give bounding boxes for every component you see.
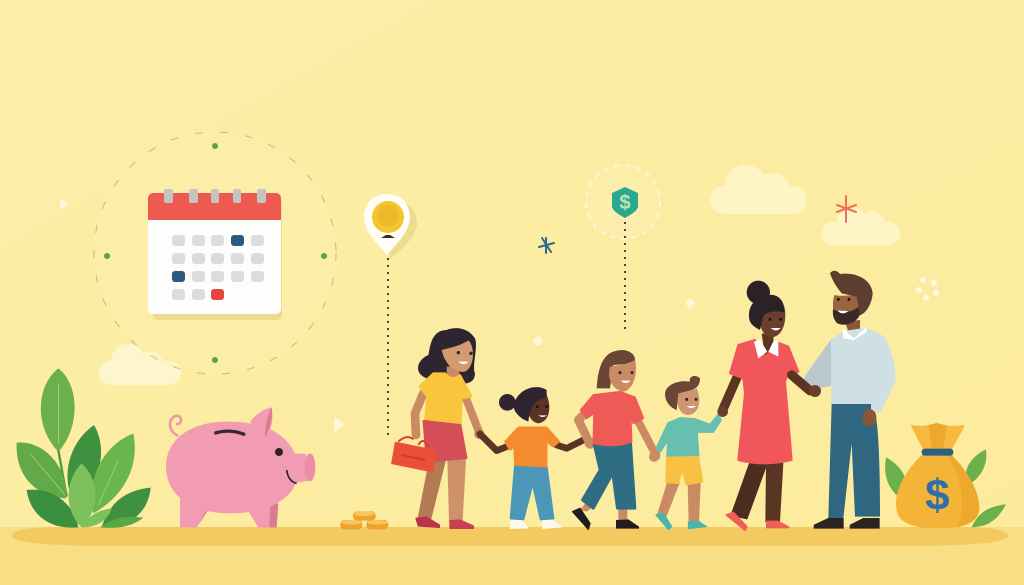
dashed orbit around calendar <box>94 132 336 374</box>
sparkle: white dot ring <box>916 277 939 301</box>
decorative small shapes <box>60 198 695 432</box>
icon: piggy bank <box>166 407 315 527</box>
cloud: left <box>99 344 181 385</box>
icon: money bag with leaves <box>885 423 1006 528</box>
icon: dollar shield with dashed ring: $ <box>619 192 631 214</box>
sparkle: red star <box>837 196 856 222</box>
sparkle: blue star <box>539 238 554 253</box>
cloud: upper right <box>710 165 807 214</box>
ground <box>0 527 1024 585</box>
icon: dollar shield with dashed ring <box>586 165 660 239</box>
icon: coin stack <box>340 511 388 529</box>
person: girl in red shirt <box>573 350 660 529</box>
dotted line from shield <box>624 222 626 330</box>
cloud: right <box>822 207 900 245</box>
icon: coin map pin <box>364 194 417 260</box>
dotted line from pin <box>387 258 389 440</box>
person: woman in red dress <box>717 281 798 530</box>
icon: calendar <box>148 189 282 320</box>
person: woman with red bag <box>391 328 484 528</box>
plant: green leaves <box>17 368 151 528</box>
person: small girl in orange <box>480 387 587 529</box>
person: bearded man <box>792 271 895 528</box>
icon: money bag with leaves: $ <box>925 471 950 520</box>
person: boy in teal <box>649 376 721 529</box>
